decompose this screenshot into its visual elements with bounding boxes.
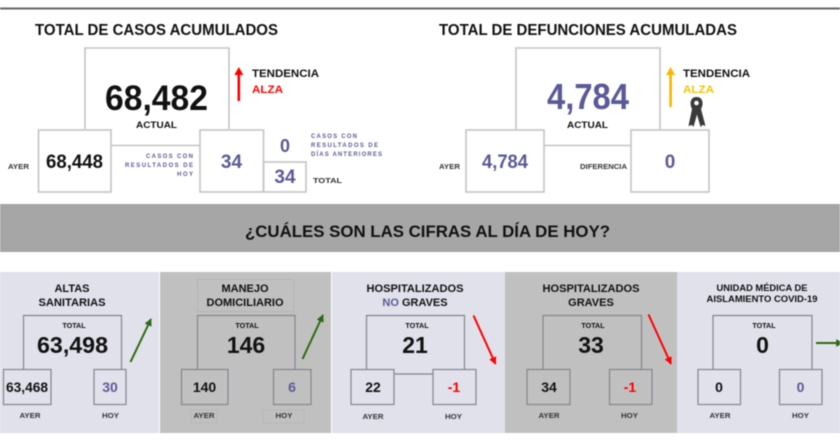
heading: altas sanitarias: [38, 283, 106, 309]
box: altas hoy: 30: [102, 379, 118, 395]
trend label: casos: [252, 68, 319, 96]
banner: cifras al dia de hoy: [0, 204, 840, 252]
box: unidad medica ayer: 0: [715, 379, 723, 395]
box: graves hoy: [610, 370, 652, 420]
text: casos con resultados de dias anteriores: CASOS CON: [311, 134, 357, 140]
heading: altas sanitarias: SANITARIAS: [38, 297, 106, 309]
box: total casos nuevos: [264, 162, 343, 192]
box: casos actual: [85, 48, 229, 130]
box: no graves ayer: 22: [365, 379, 381, 395]
banner: cifras al dia de hoy: ¿CUÁLES SON LAS CIFRAS AL DÍA DE HOY?: [245, 222, 610, 241]
panel: hospitalizados no graves: [332, 272, 505, 433]
box: altas ayer: AYER: [20, 413, 40, 420]
box: total graves: [543, 316, 642, 369]
heading: unidad medica: AISLAMIENTO COVID-19: [706, 294, 818, 305]
arrow: unidad medica estable: [816, 342, 840, 344]
box: total no graves: 21: [402, 332, 428, 358]
text: casos con resultados de dias anteriores: DÍAS ANTERIORES: [311, 150, 382, 158]
box: graves ayer: 34: [541, 379, 557, 395]
arrow: tendencia defunciones: [666, 67, 675, 107]
box: total altas: 63,498: [37, 332, 108, 358]
box: total graves: 33: [578, 332, 604, 358]
box: casos ayer: 68,448: [46, 151, 103, 173]
box: casos hoy: 34: [221, 152, 242, 173]
box: total graves: TOTAL: [581, 321, 605, 330]
box: manejo ayer: 140: [193, 379, 216, 395]
heading: manejo domiciliario: [206, 283, 284, 309]
box: altas ayer: 63,468: [6, 379, 48, 395]
box: casos ayer: [8, 130, 111, 192]
heading: hospitalizados graves: GRAVES: [568, 297, 614, 309]
box: defunciones ayer: [439, 130, 544, 192]
box: no graves hoy: HOY: [445, 414, 462, 421]
box: diferencia: 0: [665, 152, 675, 173]
box: total manejo: TOTAL: [235, 321, 259, 330]
icon: black mourning ribbon: [688, 97, 706, 127]
panel: altas sanitarias: [0, 272, 159, 433]
box: altas hoy: HOY: [102, 413, 119, 420]
box: no graves hoy: [433, 370, 476, 421]
panel: hospitalizados graves: [505, 272, 677, 433]
box: total unidad medica: [713, 316, 812, 369]
panel: manejo domiciliario: [160, 272, 331, 433]
text: casos con resultados de dias anteriores: RESULTADOS DE: [311, 143, 378, 149]
box: total casos nuevos: 34: [274, 167, 296, 188]
text: casos con resultados de dias anteriores: [311, 134, 382, 158]
arrow: graves baja: [648, 314, 671, 364]
heading: hospitalizados graves: HOSPITALIZADOS: [542, 283, 640, 295]
trend label: casos: TENDENCIA: [252, 68, 319, 80]
arrow: manejo sube: [302, 315, 323, 359]
box: graves hoy: -1: [624, 379, 636, 395]
heading: unidad medica: [706, 283, 818, 305]
heading: unidad medica: UNIDAD MÉDICA DE: [716, 283, 808, 294]
box: defunciones ayer: 4,784: [482, 151, 528, 173]
trend label: casos: ALZA: [252, 84, 283, 96]
box: total no graves: [366, 316, 464, 369]
box: total altas: TOTAL: [62, 321, 86, 330]
label: diferencia: DIFERENCIA: [580, 164, 627, 171]
box: total casos nuevos: TOTAL: [313, 178, 343, 185]
box: manejo ayer: AYER: [194, 413, 214, 420]
arrow: no graves baja: [474, 316, 496, 364]
arrow: tendencia casos: [234, 67, 243, 101]
heading: hospitalizados no graves: HOSPITALIZADOS: [366, 283, 464, 295]
trend label: defunciones: ALZA: [683, 84, 714, 96]
box: unidad medica hoy: HOY: [792, 413, 809, 420]
box: defunciones actual: [516, 48, 660, 130]
trend label: defunciones: [683, 68, 750, 96]
box: manejo ayer: [182, 370, 228, 423]
box: graves ayer: AYER: [538, 413, 560, 420]
heading: manejo domiciliario: DOMICILIARIO: [206, 297, 284, 309]
box: unidad medica hoy: [780, 370, 822, 420]
text: casos con resultados de hoy: [125, 154, 193, 178]
box: graves ayer: [527, 370, 570, 420]
box: total altas: [24, 316, 122, 369]
trend label: defunciones: TENDENCIA: [683, 68, 750, 80]
box: manejo hoy: HOY: [276, 413, 293, 420]
box: altas ayer: [4, 370, 51, 420]
heading: manejo domiciliario: MANEJO: [221, 283, 269, 295]
heading: defunciones: TOTAL DE DEFUNCIONES ACUMULADAS: [439, 22, 737, 39]
box: unidad medica ayer: AYER: [710, 413, 730, 420]
box: graves hoy: HOY: [621, 413, 638, 420]
box: total unidad medica: 0: [756, 332, 769, 358]
box: total manejo: 146: [227, 332, 265, 358]
box: total unidad medica: TOTAL: [752, 321, 776, 330]
arrow: altas sube: [130, 319, 151, 362]
box: manejo hoy: [263, 370, 311, 423]
box: total no graves: TOTAL: [405, 321, 429, 330]
panel: unidad medica de aislamiento: [677, 272, 840, 433]
text: casos con resultados de hoy: HOY: [177, 172, 193, 178]
box: defunciones actual: 4,784: [547, 76, 629, 117]
panel: total de defunciones acumuladas: [439, 22, 750, 192]
box: casos actual: 68,482: [105, 79, 208, 118]
value: dias anteriores: 0: [280, 136, 290, 156]
box: no graves hoy: -1: [448, 379, 460, 395]
box: diferencia: [631, 130, 709, 192]
box: defunciones ayer: AYER: [439, 164, 460, 171]
box: defunciones actual: ACTUAL: [567, 120, 609, 130]
box: altas hoy: [94, 370, 126, 420]
heading: hospitalizados no graves: NO GRAVES: [382, 297, 448, 309]
heading: altas sanitarias: ALTAS: [54, 283, 90, 295]
heading: hospitalizados graves: [542, 283, 640, 309]
heading: hospitalizados no graves: [366, 283, 464, 309]
box: no graves ayer: [351, 370, 394, 421]
text: casos con resultados de hoy: CASOS CON: [146, 154, 193, 160]
box: unidad medica hoy: 0: [797, 379, 805, 395]
box: casos hoy: [200, 130, 264, 192]
heading: casos: TOTAL DE CASOS ACUMULADOS: [35, 22, 278, 39]
box: casos ayer: AYER: [8, 164, 29, 171]
box: manejo hoy: 6: [288, 379, 296, 395]
box: casos actual: ACTUAL: [136, 120, 178, 130]
text: casos con resultados de hoy: RESULTADOS DE: [125, 163, 193, 169]
box: no graves ayer: AYER: [362, 414, 384, 421]
box: unidad medica ayer: [698, 370, 740, 420]
box: total manejo: [198, 316, 295, 369]
panel: total de casos acumulados: [8, 22, 382, 192]
